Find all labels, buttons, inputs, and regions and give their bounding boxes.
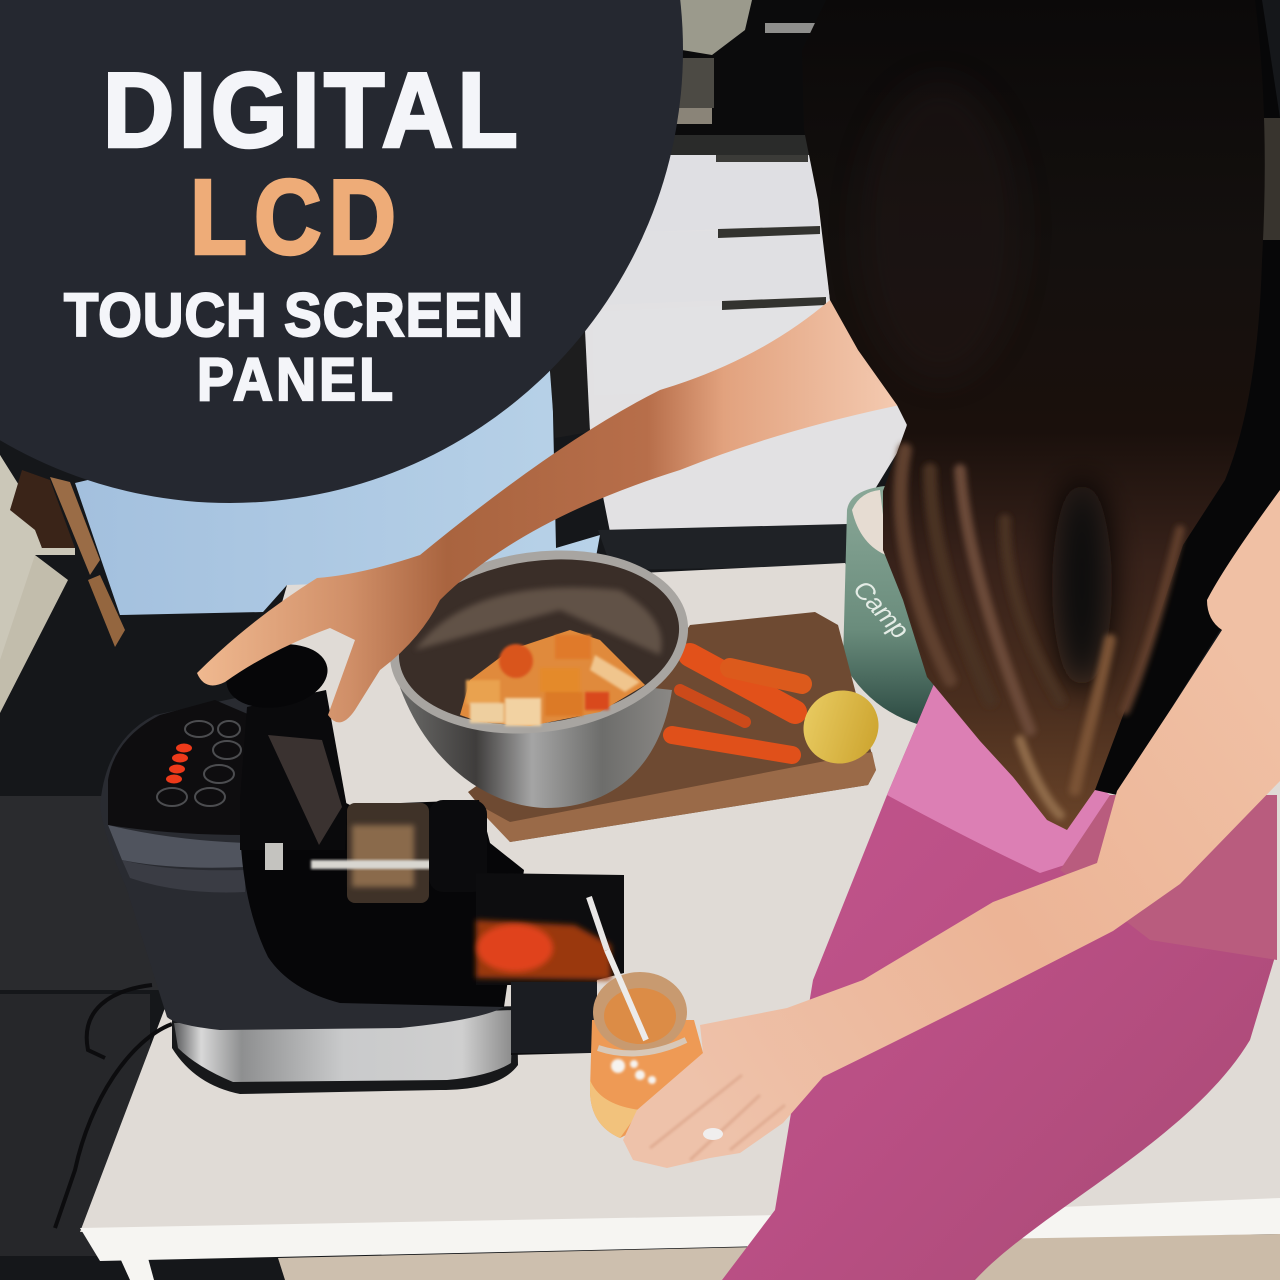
long dark hair bbox=[802, 0, 1265, 830]
white drawers bbox=[548, 135, 910, 570]
woman's upper left arm and hand bbox=[197, 300, 900, 722]
transparent chamber bbox=[347, 803, 429, 903]
juicer body bbox=[100, 695, 504, 1030]
pulp container bbox=[476, 873, 624, 1055]
wooden floor, right part bbox=[940, 1234, 1280, 1280]
woman's right arm, shoulder and hand bbox=[623, 490, 1280, 1168]
table top bbox=[80, 563, 1280, 1232]
carrots bbox=[672, 655, 802, 755]
upper kitchen: dark worktop and appliance bbox=[670, 0, 850, 135]
title badge bbox=[0, 0, 683, 503]
finger gaps bbox=[650, 1075, 785, 1160]
black top bbox=[1040, 0, 1280, 795]
feed chute bbox=[240, 690, 347, 850]
canister lettering: Camp bbox=[848, 574, 915, 645]
title: LCD: LCD bbox=[190, 159, 396, 277]
left wall and door frame bbox=[0, 455, 125, 713]
steel bowl with fruit bbox=[378, 532, 700, 808]
cutting board bbox=[468, 612, 876, 842]
pink top waistband bbox=[887, 677, 1110, 873]
juice jar bbox=[590, 950, 705, 1138]
straw bbox=[589, 897, 607, 950]
juicer base steel band bbox=[172, 1006, 518, 1094]
ring bbox=[703, 1128, 723, 1140]
subtitle: TOUCH SCREEN: TOUCH SCREEN bbox=[64, 282, 523, 350]
juicer neck band bbox=[108, 825, 245, 868]
juicer head and chamber bbox=[240, 800, 524, 1007]
juicer control panel bbox=[108, 700, 250, 835]
subtitle: PANEL: PANEL bbox=[197, 347, 393, 414]
right side appliance bbox=[1262, 118, 1280, 240]
blue fridge bbox=[75, 370, 600, 615]
power cord bbox=[55, 985, 172, 1228]
wooden floor below the table bbox=[278, 1246, 800, 1280]
display digits bbox=[166, 744, 192, 784]
floor tiles bbox=[0, 796, 240, 1256]
juicer bbox=[100, 637, 624, 1094]
dark shadow in the hair bbox=[1052, 480, 1112, 690]
dark circle panel bbox=[0, 0, 683, 503]
leggings bbox=[722, 677, 1277, 1280]
hair strands bbox=[901, 450, 1180, 815]
title: DIGITAL: DIGITAL bbox=[103, 50, 518, 169]
lemon bbox=[790, 677, 892, 777]
green canister bbox=[843, 486, 945, 725]
touch buttons bbox=[157, 721, 241, 806]
chute lid bbox=[221, 637, 333, 715]
table edge bbox=[80, 1198, 1280, 1280]
